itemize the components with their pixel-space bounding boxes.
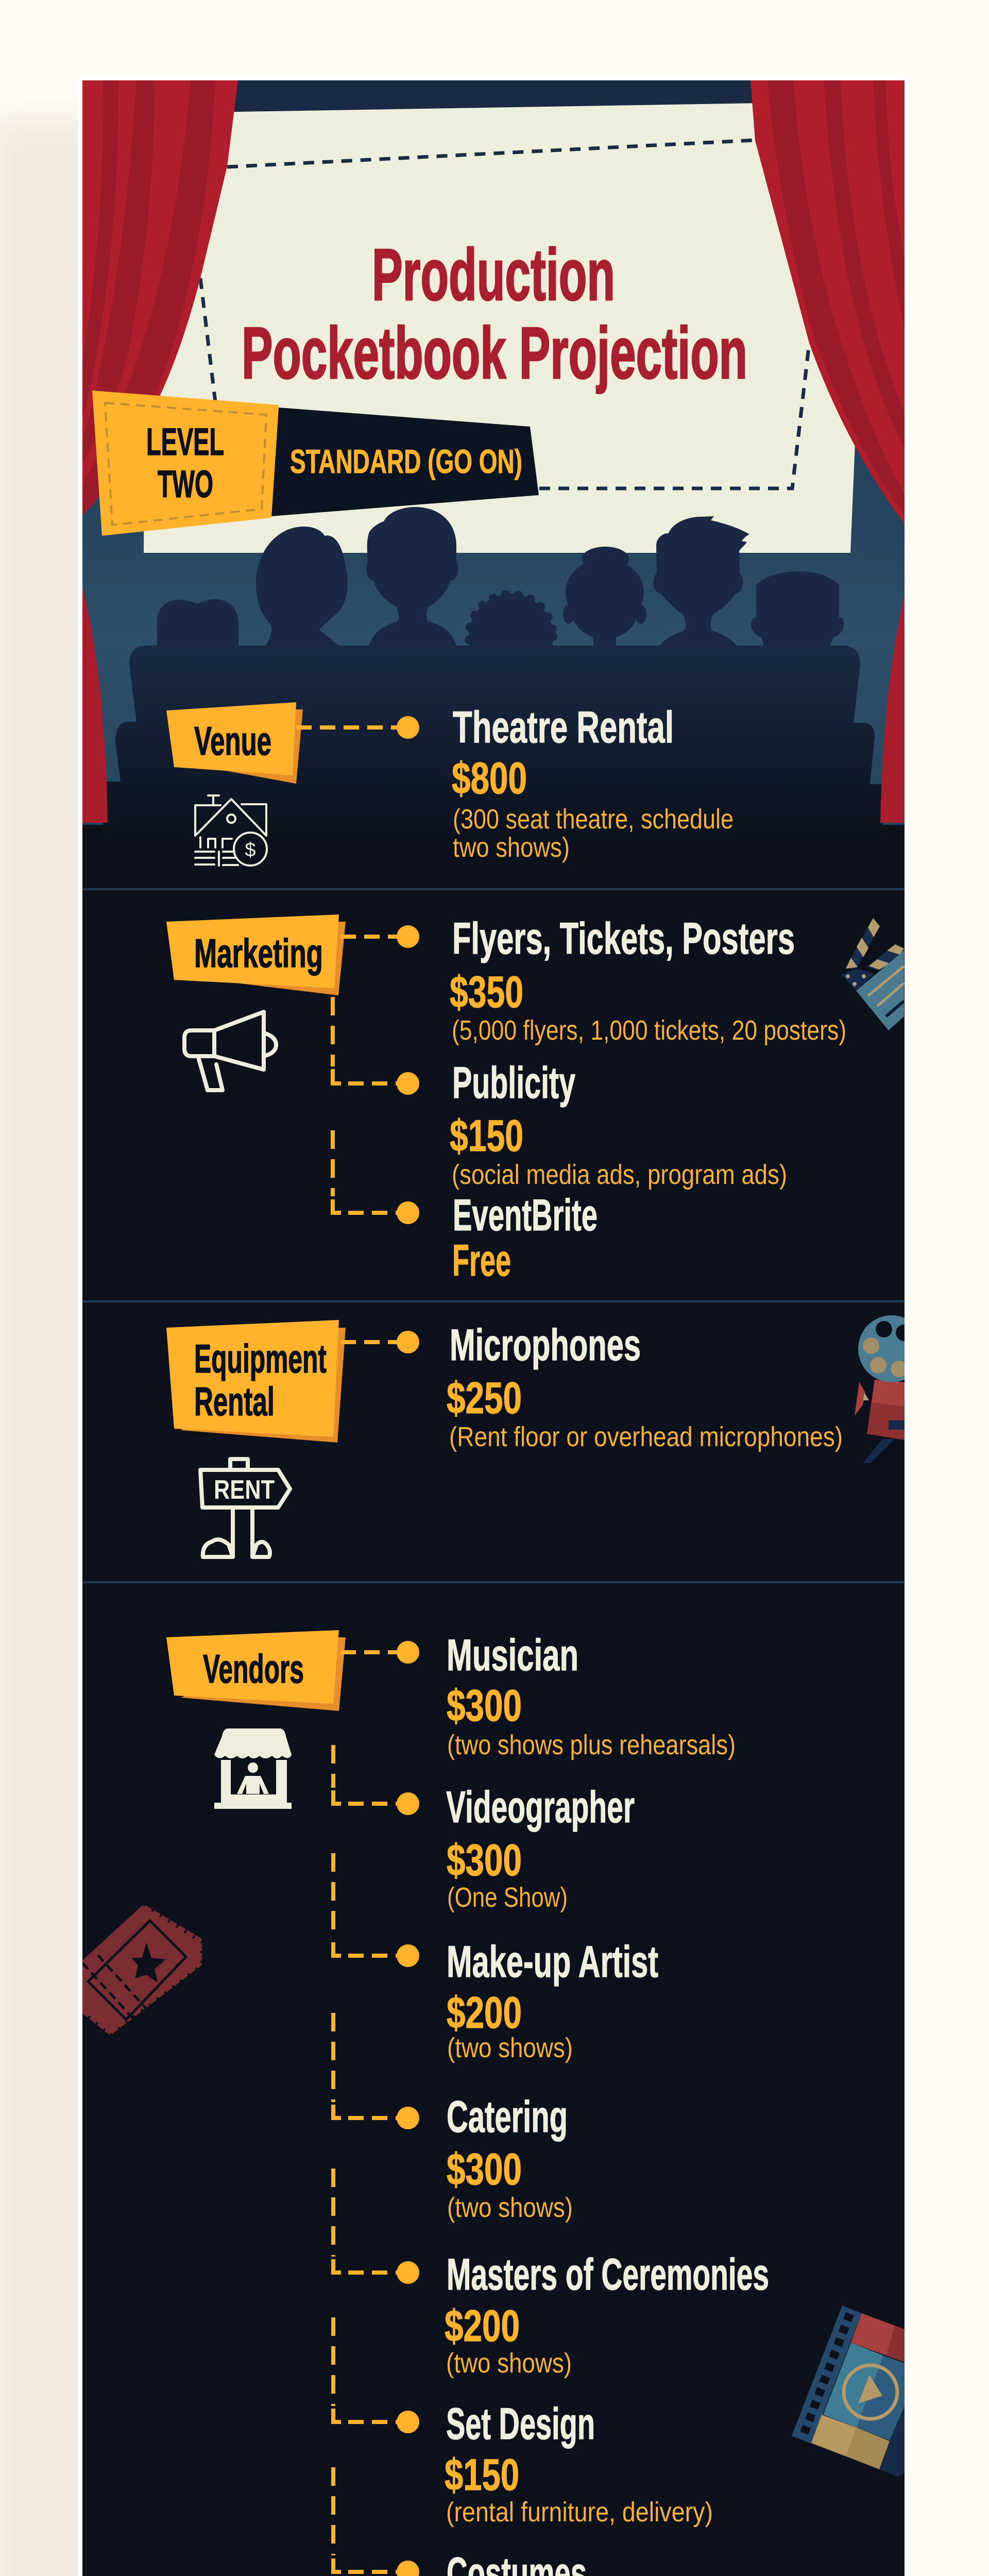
item: catering: Catering xyxy=(447,2092,568,2142)
item: theatre rental: $800 xyxy=(452,754,527,803)
theatre seats xyxy=(103,646,883,835)
item: eventbrite: Free xyxy=(452,1236,511,1285)
item: musician: Musician xyxy=(447,1631,578,1680)
item: make-up artist: Make-up Artist xyxy=(447,1937,658,1987)
level badge: LEVEL xyxy=(146,420,224,463)
tag: vendors xyxy=(166,1630,346,1711)
title xyxy=(242,234,747,394)
level badge: TWO xyxy=(158,463,213,505)
item: publicity: (social media ads, program ads) xyxy=(452,1159,787,1190)
person 4 curly hair xyxy=(465,590,557,646)
section: venue xyxy=(166,702,734,866)
panel: theatre wall xyxy=(82,446,905,825)
icon: house with coin: $ xyxy=(245,839,256,861)
person 1 xyxy=(157,599,238,647)
item: flyers tickets posters: (5,000 flyers, 1,000 tickets, 20 posters) xyxy=(452,1015,846,1046)
item: catering: $300 xyxy=(447,2145,522,2194)
level badge xyxy=(92,391,279,536)
connectors: marketing xyxy=(333,925,419,1224)
item: masters of ceremonies: $200 xyxy=(445,2301,520,2351)
decor: clapperboard xyxy=(841,918,904,1030)
item: eventbrite xyxy=(452,1191,598,1285)
item: theatre rental: two shows) xyxy=(453,832,570,863)
item: catering xyxy=(447,2092,573,2223)
item: make-up artist: (two shows) xyxy=(447,2032,573,2063)
item: publicity: $150 xyxy=(450,1111,523,1161)
item: microphones: $250 xyxy=(447,1374,522,1423)
level label tab xyxy=(271,408,539,516)
connector: equipment xyxy=(340,1331,419,1353)
item: set design xyxy=(445,2399,713,2528)
icon: house with coin xyxy=(195,795,267,866)
icon: rent sign: RENT xyxy=(214,1475,275,1505)
item: masters of ceremonies xyxy=(445,2250,769,2379)
audience silhouettes xyxy=(157,507,844,646)
item: musician: $300 xyxy=(447,1681,522,1731)
icon: megaphone xyxy=(184,1012,276,1090)
item: set design: $150 xyxy=(445,2450,519,2500)
person 2 xyxy=(256,527,348,647)
tag: venue: Venue xyxy=(194,718,271,764)
item: microphones xyxy=(447,1320,843,1452)
item: videographer: Videographer xyxy=(446,1783,635,1832)
tag: equipment rental: Rental xyxy=(194,1379,275,1424)
person 3 xyxy=(366,507,458,647)
tag: equipment rental: Equipment xyxy=(194,1336,327,1381)
section: vendors xyxy=(166,1630,769,2576)
icon: rent sign xyxy=(200,1459,290,1557)
item: flyers tickets posters: $350 xyxy=(450,968,523,1017)
item: videographer xyxy=(446,1783,635,1913)
item: set design: (rental furniture, delivery) xyxy=(446,2497,713,2528)
decor: film strip xyxy=(792,2306,905,2477)
item: set design: Set Design xyxy=(446,2399,595,2449)
connectors: vendors xyxy=(333,1641,419,2576)
section dividers xyxy=(82,888,905,2576)
lower curtain edge right xyxy=(880,586,907,823)
item: make-up artist xyxy=(447,1937,658,2063)
right curtain xyxy=(751,80,905,524)
tag: vendors: Vendors xyxy=(203,1646,304,1691)
person 7 flat hair xyxy=(751,571,844,647)
tag: marketing: Marketing xyxy=(194,930,323,976)
title: Production xyxy=(372,234,615,316)
item: masters of ceremonies: Masters of Ceremonies xyxy=(447,2250,769,2299)
dashed screen outline xyxy=(200,140,809,488)
decor: film projector xyxy=(855,1315,925,1463)
section: marketing xyxy=(166,914,846,1285)
item: flyers tickets posters: Flyers, Tickets, Posters xyxy=(452,914,795,963)
cinema screen xyxy=(144,103,855,553)
item: musician: (two shows plus rehearsals) xyxy=(447,1730,736,1760)
item: flyers tickets posters xyxy=(450,914,846,1046)
panel: dark background xyxy=(82,825,905,2576)
item: musician xyxy=(447,1631,736,1760)
item: theatre rental xyxy=(452,703,734,863)
item: theatre rental: (300 seat theatre, schedule xyxy=(453,804,734,835)
item: publicity: Publicity xyxy=(452,1058,575,1108)
ceiling band xyxy=(234,80,752,112)
item: masters of ceremonies: (two shows) xyxy=(446,2348,572,2379)
item: publicity xyxy=(450,1058,787,1190)
person 5 with bun xyxy=(563,547,646,647)
item: eventbrite: EventBrite xyxy=(453,1191,598,1240)
item: microphones: (Rent floor or overhead microphones) xyxy=(449,1421,843,1452)
tag: equipment rental xyxy=(166,1320,346,1443)
level label tab: STANDARD (GO ON) xyxy=(290,443,522,480)
item: videographer: (One Show) xyxy=(447,1882,568,1913)
lower curtain edge left xyxy=(82,586,108,823)
section: equipment rental xyxy=(166,1320,843,1557)
connector: venue xyxy=(296,716,419,739)
item: videographer: $300 xyxy=(447,1836,522,1885)
item: make-up artist: $200 xyxy=(447,1988,522,2038)
decor: ticket xyxy=(52,1904,202,2036)
tag: venue xyxy=(166,702,303,784)
icon: market stall xyxy=(214,1728,292,1809)
item: theatre rental: Theatre Rental xyxy=(453,703,674,752)
person 6 spiky hair xyxy=(653,516,749,647)
tag: marketing xyxy=(166,914,346,995)
item: catering: (two shows) xyxy=(447,2192,573,2223)
item: microphones: Microphones xyxy=(450,1320,641,1370)
left curtain xyxy=(82,80,238,515)
